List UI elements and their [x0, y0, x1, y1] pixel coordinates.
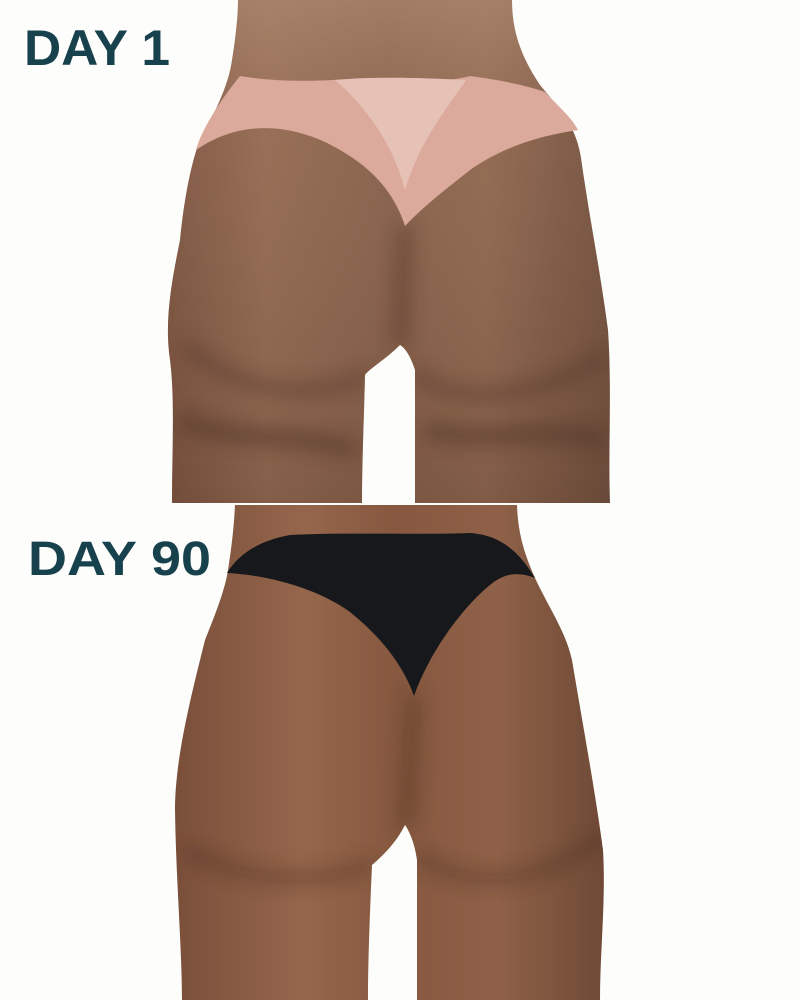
- shading: day 90 contours: [185, 695, 603, 878]
- shading: day 1 tone overlay: [160, 0, 620, 503]
- heading: day 1: DAY 1: [24, 20, 170, 76]
- photo: day 1 body silhouette: [168, 0, 610, 503]
- panel: day 1 figure: [160, 0, 620, 503]
- heading: day 90: DAY 90: [28, 533, 211, 586]
- underwear: pink lace: [196, 76, 578, 226]
- shading: day 1 contours: [180, 225, 606, 450]
- photo: day 90 body silhouette: [175, 505, 604, 1000]
- underwear: black: [227, 533, 535, 696]
- panel: day 90 figure: [175, 505, 604, 1000]
- underwear: centre panel: [335, 78, 466, 190]
